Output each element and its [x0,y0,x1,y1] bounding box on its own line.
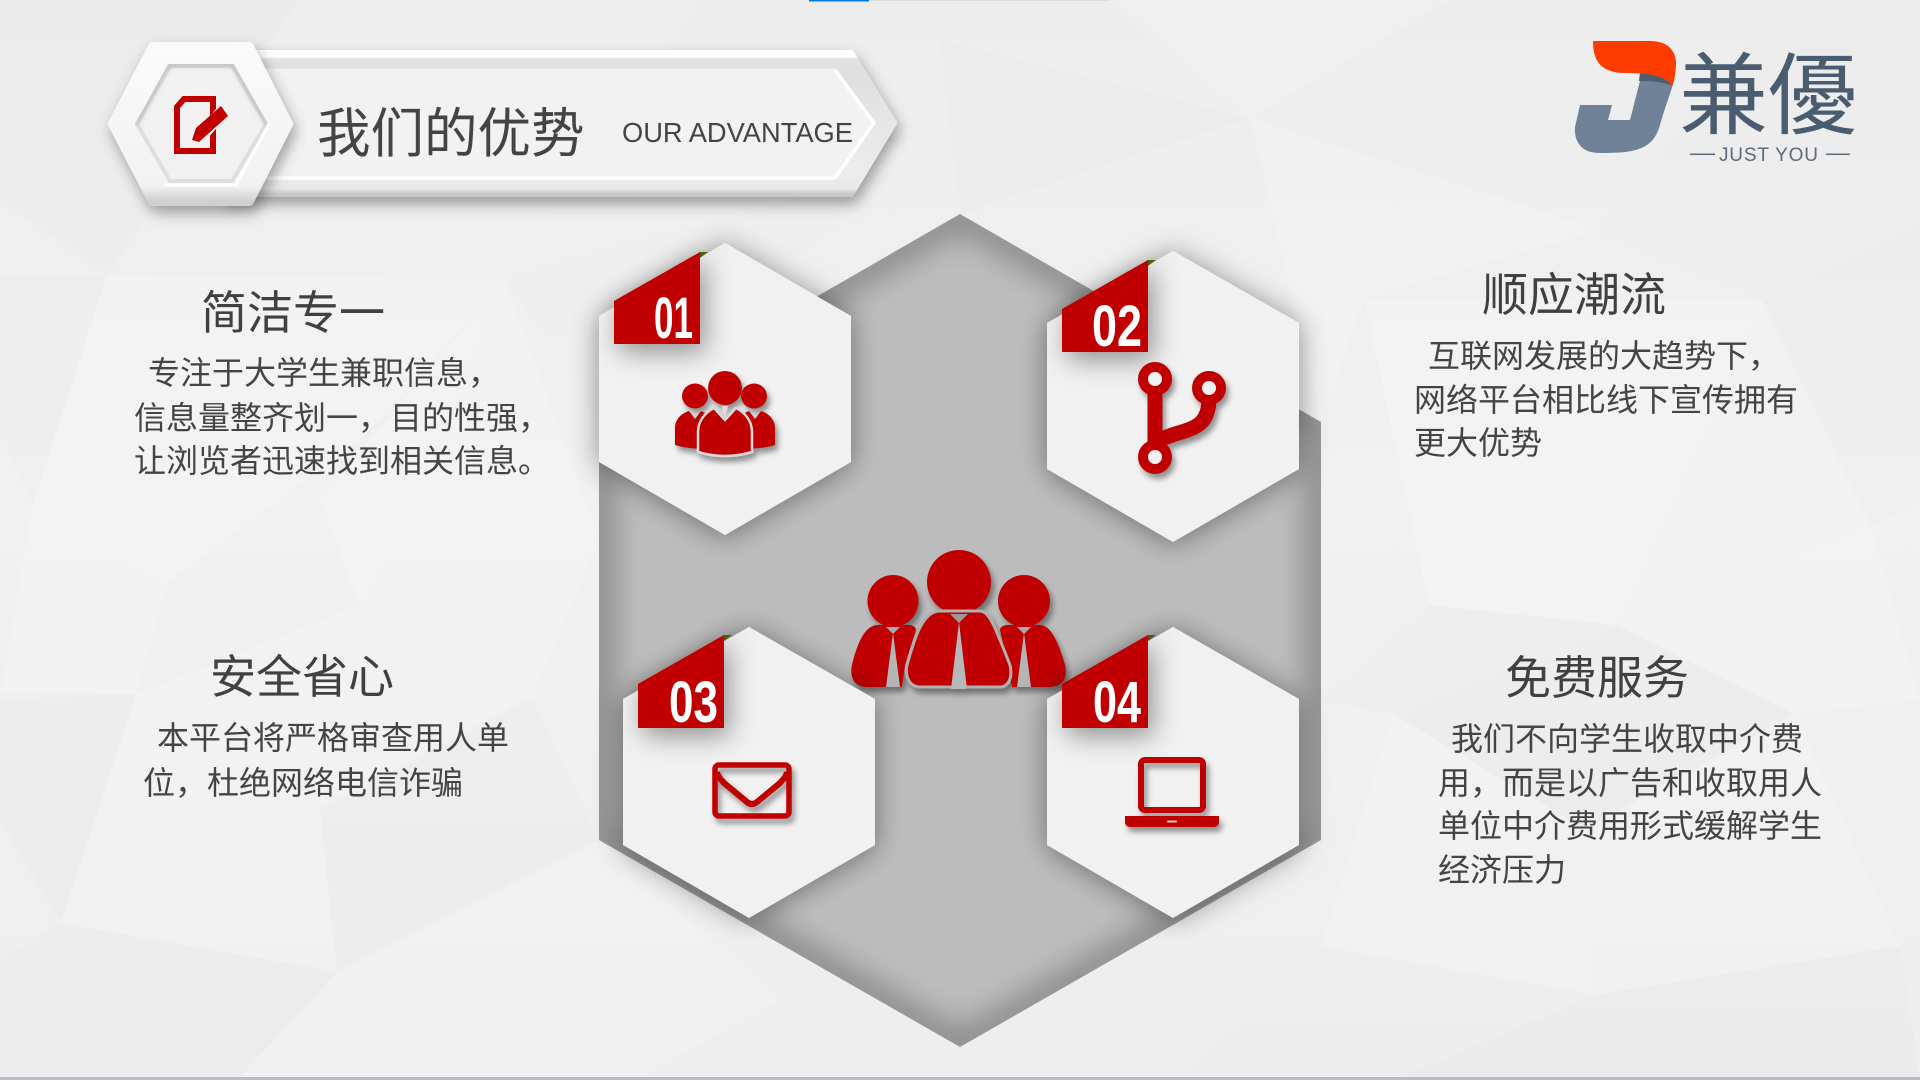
icon: team [675,371,775,456]
text block: 简洁专一 [134,287,550,479]
body: 互联网发展的大趋势下， [1428,338,1780,374]
icon: laptop [1125,760,1219,827]
body [143,720,509,801]
number: 03 [669,670,718,735]
hexagon panel [1047,251,1299,542]
body: 网络平台相比线下宣传拥有 [1414,382,1798,418]
body [134,355,550,479]
logo wordmark: 兼優 [1679,24,1857,153]
body: 专注于大学生兼职信息， [148,355,500,391]
header banner [113,47,894,201]
body: 让浏览者迅速找到相关信息。 [134,443,550,479]
right person [998,575,1066,687]
heading: 简洁专一 [201,287,385,339]
heading: English title: OUR ADVANTAGE [622,117,853,148]
body: 本平台将严格审查用人单 [157,720,509,756]
text block: 免费服务 [1438,652,1822,888]
icon: branch [1143,367,1221,469]
body: 更大优势 [1414,425,1542,461]
body: 经济压力 [1438,852,1566,888]
hexagon panel [623,627,875,918]
logo [1575,24,1857,166]
heading: Chinese title: 我们的优势 [317,105,584,164]
number: 01 [654,286,693,351]
body: 位，杜绝网络电信诈骗 [143,765,463,801]
body: 用，而是以广告和收取用人 [1438,765,1822,801]
banner bar [200,53,894,194]
text block: 安全省心 [143,651,509,801]
card 01 [599,243,851,535]
logo tagline: JUST YOU [1719,145,1818,166]
card 02 [1047,251,1299,542]
number flag [638,635,732,728]
body: 我们不向学生收取中介费 [1451,721,1803,757]
body: 信息量整齐划一，目的性强， [134,400,550,436]
header hexagon badge [113,47,288,201]
number flag [1062,635,1156,728]
number: 02 [1092,294,1142,359]
body: 单位中介费用形式缓解学生 [1438,808,1822,844]
number flag [1062,260,1156,352]
body [1414,338,1798,461]
bottom edge strip [0,1077,1920,1080]
icon: edit document [177,99,229,151]
heading: 安全省心 [210,651,394,703]
heading: 顺应潮流 [1482,269,1666,321]
card 03 [623,627,875,918]
hexagon panel [599,243,851,535]
number flag [614,252,708,344]
top progress strip [809,0,1110,2]
body [1438,721,1822,888]
heading: 免费服务 [1505,652,1689,704]
central recessed hexagon [599,214,1321,1047]
icon: envelope [715,765,789,816]
hexagon panel [1047,627,1299,918]
text block: 顺应潮流 [1414,269,1798,461]
left person [851,575,918,687]
card 04 [1047,627,1299,918]
icon: large team [851,550,1066,689]
number: 04 [1093,670,1141,735]
centre person [906,550,1011,689]
logo mark: J [1575,41,1676,153]
